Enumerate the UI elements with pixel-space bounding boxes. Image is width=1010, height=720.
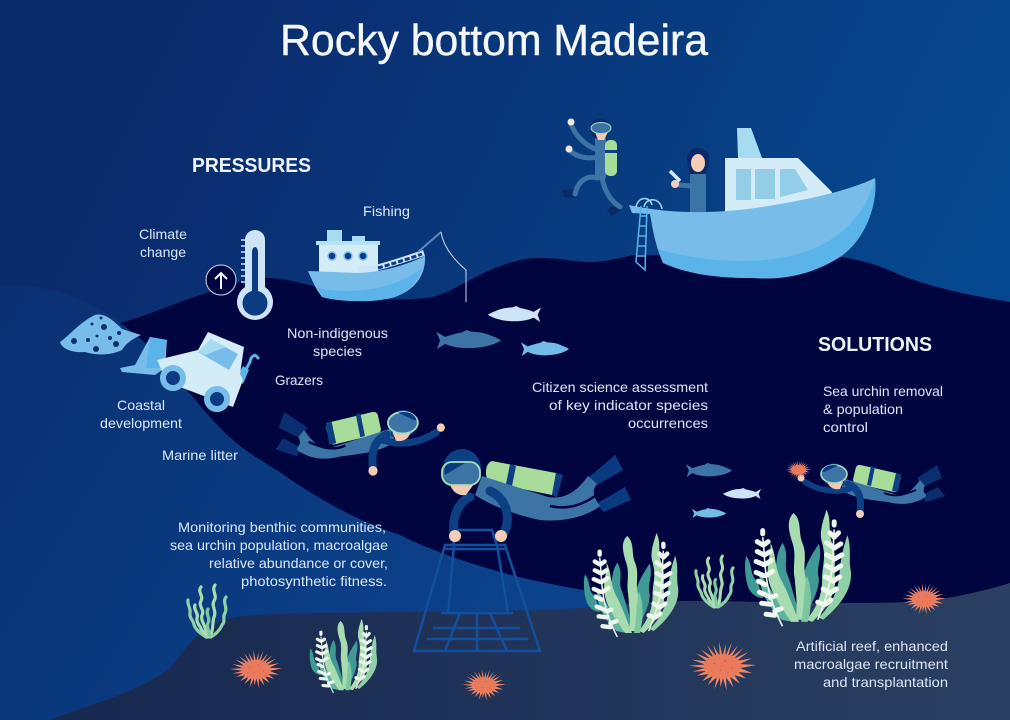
text: artificial reef	[794, 638, 948, 690]
illustration: diver swimming	[275, 410, 445, 476]
kelp: right large	[745, 510, 851, 626]
kelp: centre-right large	[584, 533, 678, 637]
text: citizen science	[532, 379, 708, 431]
kelp: centre small	[696, 556, 733, 607]
text: artificial reef: Artificial reef, enhanced	[796, 638, 948, 654]
person on boat	[670, 148, 709, 214]
label: non-indigenous species: Non-indigenous	[287, 325, 388, 341]
sea urchin: centre	[462, 669, 506, 701]
icon: fish group upper	[436, 306, 569, 356]
text: sea urchin removal	[823, 383, 943, 435]
left shallow water region	[0, 285, 700, 720]
text: artificial reef: and transplantation	[823, 674, 948, 690]
text: monitoring: Monitoring benthic communities,	[178, 519, 386, 535]
heading: pressures: PRESSURES	[192, 155, 311, 177]
label: non-indigenous species	[287, 325, 388, 359]
illustration: research boat	[629, 128, 875, 278]
illustration: diver with urchin	[798, 463, 945, 518]
text: sea urchin removal: & population	[823, 401, 903, 417]
kelp: left small	[188, 585, 226, 637]
title: Rocky bottom Madeira	[280, 16, 709, 65]
illustration: jumping diver	[562, 118, 622, 216]
label: grazers: Grazers	[275, 372, 323, 388]
text: citizen science: occurrences	[628, 415, 708, 431]
sea urchin: large	[689, 641, 756, 691]
heading: solutions: SOLUTIONS	[818, 334, 932, 356]
text: monitoring: photosynthetic fitness.	[241, 573, 387, 589]
illustration: diver with quadrat	[442, 449, 631, 542]
icon: held urchin	[786, 460, 811, 479]
text: monitoring: relative abundance or cover,	[209, 555, 388, 571]
icon: bulldozer	[120, 332, 258, 409]
icon: fish group lower	[686, 463, 761, 518]
text: citizen science: Citizen science assessment	[532, 379, 708, 395]
ladder	[636, 198, 662, 270]
deep dark water	[120, 255, 1010, 640]
label: coastal development: Coastal	[117, 397, 165, 413]
text: sea urchin removal: control	[823, 419, 868, 435]
text: monitoring	[170, 519, 388, 589]
text: citizen science: of key indicator species	[549, 397, 708, 413]
label: climate change: change	[140, 244, 186, 260]
text: sea urchin removal: Sea urchin removal	[823, 383, 943, 399]
quadrat frame	[414, 530, 540, 651]
sea urchin: right	[902, 583, 946, 615]
icon: marine litter	[60, 314, 141, 354]
icon: fishing boat	[308, 230, 466, 302]
label: coastal development: development	[100, 415, 182, 431]
label: fishing: Fishing	[363, 203, 410, 219]
text: monitoring: sea urchin population, macroalgae	[170, 537, 388, 553]
sea urchin: left	[230, 650, 282, 688]
label: non-indigenous species: species	[313, 343, 362, 359]
label: marine litter: Marine litter	[162, 447, 238, 463]
kelp: left large	[310, 619, 377, 693]
seabed	[50, 583, 1010, 720]
icon: temperature up arrow	[206, 265, 236, 295]
label: coastal development	[100, 397, 182, 431]
text: artificial reef: macroalgae recruitment	[794, 656, 948, 672]
icon: thermometer	[237, 230, 273, 320]
label: climate change: Climate	[139, 226, 187, 242]
label: climate change	[139, 226, 187, 260]
